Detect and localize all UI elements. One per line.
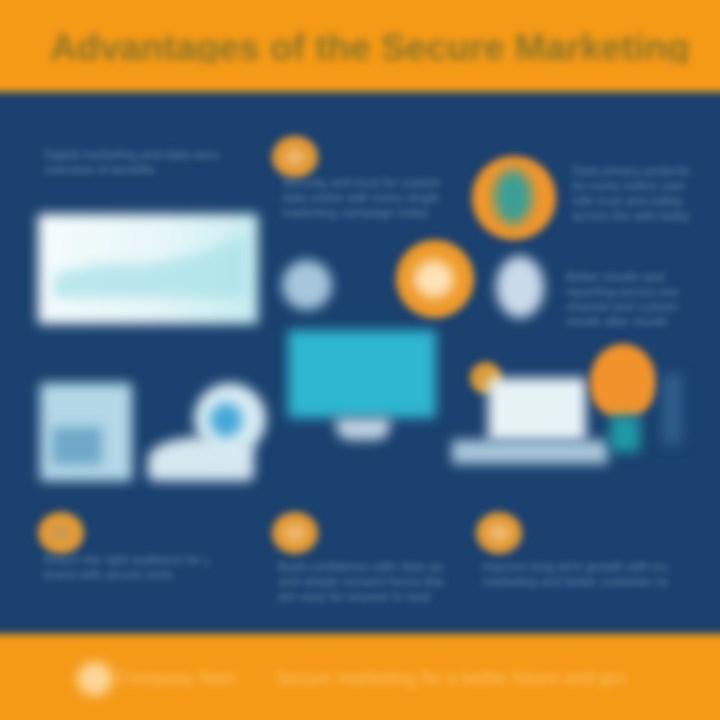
icon: bottom centre badge centre	[284, 524, 306, 542]
icon: shield dot left	[282, 260, 332, 310]
text: bottom centre: and simple consent forms that	[278, 575, 443, 589]
laptop screen	[488, 378, 586, 442]
top orange banner	[0, 0, 720, 92]
panel: laptop	[443, 338, 686, 473]
text: top right: with trust and safety	[572, 194, 683, 208]
laptop base	[452, 440, 608, 464]
footer logo and text	[70, 654, 627, 704]
text: bottom right	[482, 560, 668, 590]
hand shape	[148, 437, 254, 481]
document card	[40, 383, 132, 481]
text: bottom centre: are easy for anyone to read	[278, 590, 431, 604]
text: bottom centre	[276, 560, 444, 604]
round badge	[194, 383, 266, 455]
icon: top centre badge	[272, 136, 318, 178]
monitor stand	[336, 418, 390, 440]
text: top centre: marketing campaign today	[282, 206, 429, 220]
round badge center	[210, 403, 242, 437]
bottom orange banner	[0, 634, 720, 720]
text: bottom left: brand with secure tools	[44, 568, 173, 582]
panel: intro text	[43, 148, 220, 177]
icon: orange sun	[396, 240, 474, 318]
footer icon	[77, 662, 113, 696]
text: middle right: Better results and	[566, 270, 664, 284]
document detail	[52, 427, 102, 465]
text: top centre	[282, 176, 442, 220]
icon: bottom centre badge	[272, 512, 318, 554]
text: top centre: data online with every single	[282, 191, 439, 205]
icon: bottom right badge	[476, 512, 522, 554]
icon: bottom left badge	[38, 512, 84, 554]
panel: line chart card	[38, 214, 258, 324]
text: top right: across the web today	[572, 209, 690, 223]
bulb base	[610, 416, 640, 452]
text: top right	[571, 164, 690, 223]
chart trend	[48, 234, 250, 304]
icon: bottom right badge centre	[488, 524, 510, 542]
text: bottom left	[43, 553, 210, 582]
ring inner	[494, 170, 532, 224]
icon: orange ring with leaf	[472, 156, 556, 240]
text: middle right	[564, 270, 679, 329]
panel: left illustration	[31, 374, 275, 490]
icon: shield dot right	[496, 256, 544, 318]
icon: bottom left badge centre	[50, 524, 72, 542]
text: middle right: month after month	[566, 315, 667, 329]
side bar	[662, 374, 682, 444]
panel: intro text: overview of benefits	[44, 163, 154, 177]
text: top right: for every online user	[572, 179, 685, 193]
small orange badge	[470, 362, 502, 394]
icon: sun centre	[414, 260, 454, 298]
icon: badge centre	[285, 149, 305, 165]
panel: teal monitor	[288, 330, 436, 418]
lightbulb	[590, 344, 656, 418]
